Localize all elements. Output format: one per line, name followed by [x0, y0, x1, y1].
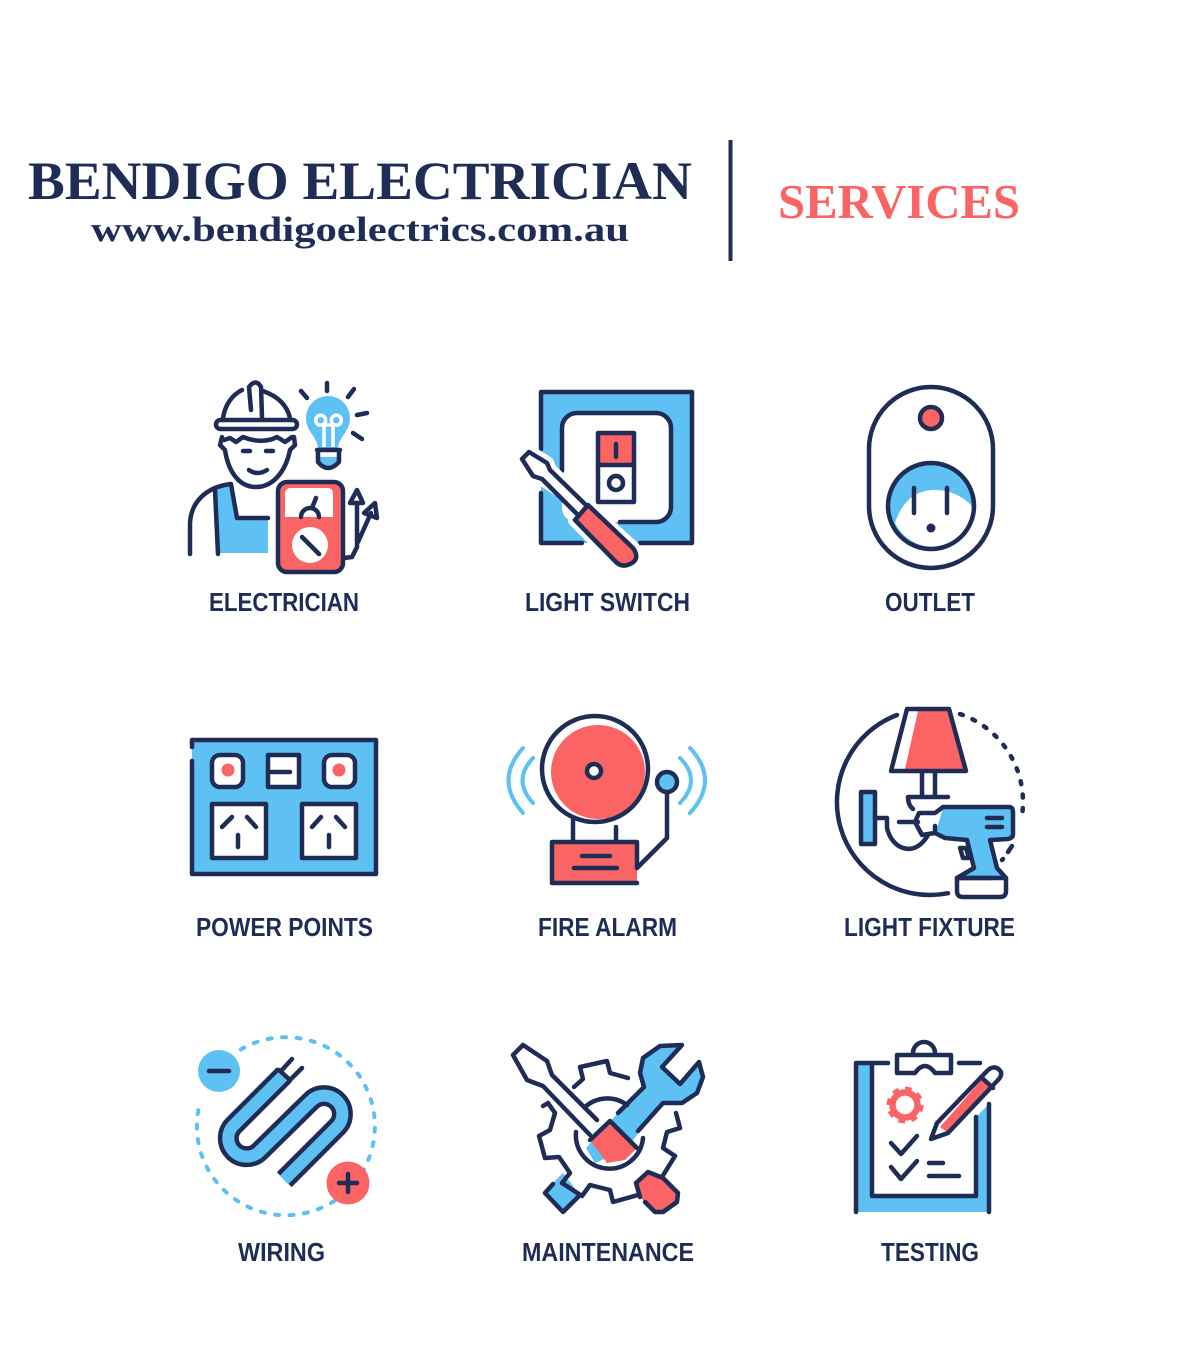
- website url: www.bendigoelectrics.com.au: [91, 210, 629, 249]
- icon: light fixture: [837, 709, 1023, 897]
- label: testing: TESTING: [881, 1237, 979, 1267]
- icon: fire alarm: [508, 716, 705, 883]
- icon: outlet: [869, 387, 993, 568]
- label: electrician: ELECTRICIAN: [209, 587, 359, 617]
- label: light fixture: LIGHT FIXTURE: [844, 912, 1015, 942]
- icon: power points: [192, 740, 376, 874]
- icon: light switch: [522, 392, 692, 566]
- title: BENDIGO ELECTRICIAN: [28, 151, 692, 211]
- divider: [728, 140, 732, 261]
- icon: wiring: [197, 1037, 375, 1215]
- label: wiring: WIRING: [238, 1237, 325, 1267]
- icon: maintenance: [513, 1045, 703, 1212]
- header: [28, 140, 1020, 261]
- label: maintenance: MAINTENANCE: [522, 1237, 694, 1267]
- label: fire alarm: FIRE ALARM: [538, 912, 677, 942]
- icon: electrician: [190, 382, 377, 572]
- label: light switch: LIGHT SWITCH: [525, 587, 690, 617]
- icon: testing: [856, 1042, 1001, 1212]
- services heading: SERVICES: [778, 174, 1020, 229]
- label: outlet: OUTLET: [885, 587, 975, 617]
- label: power points: POWER POINTS: [196, 912, 373, 942]
